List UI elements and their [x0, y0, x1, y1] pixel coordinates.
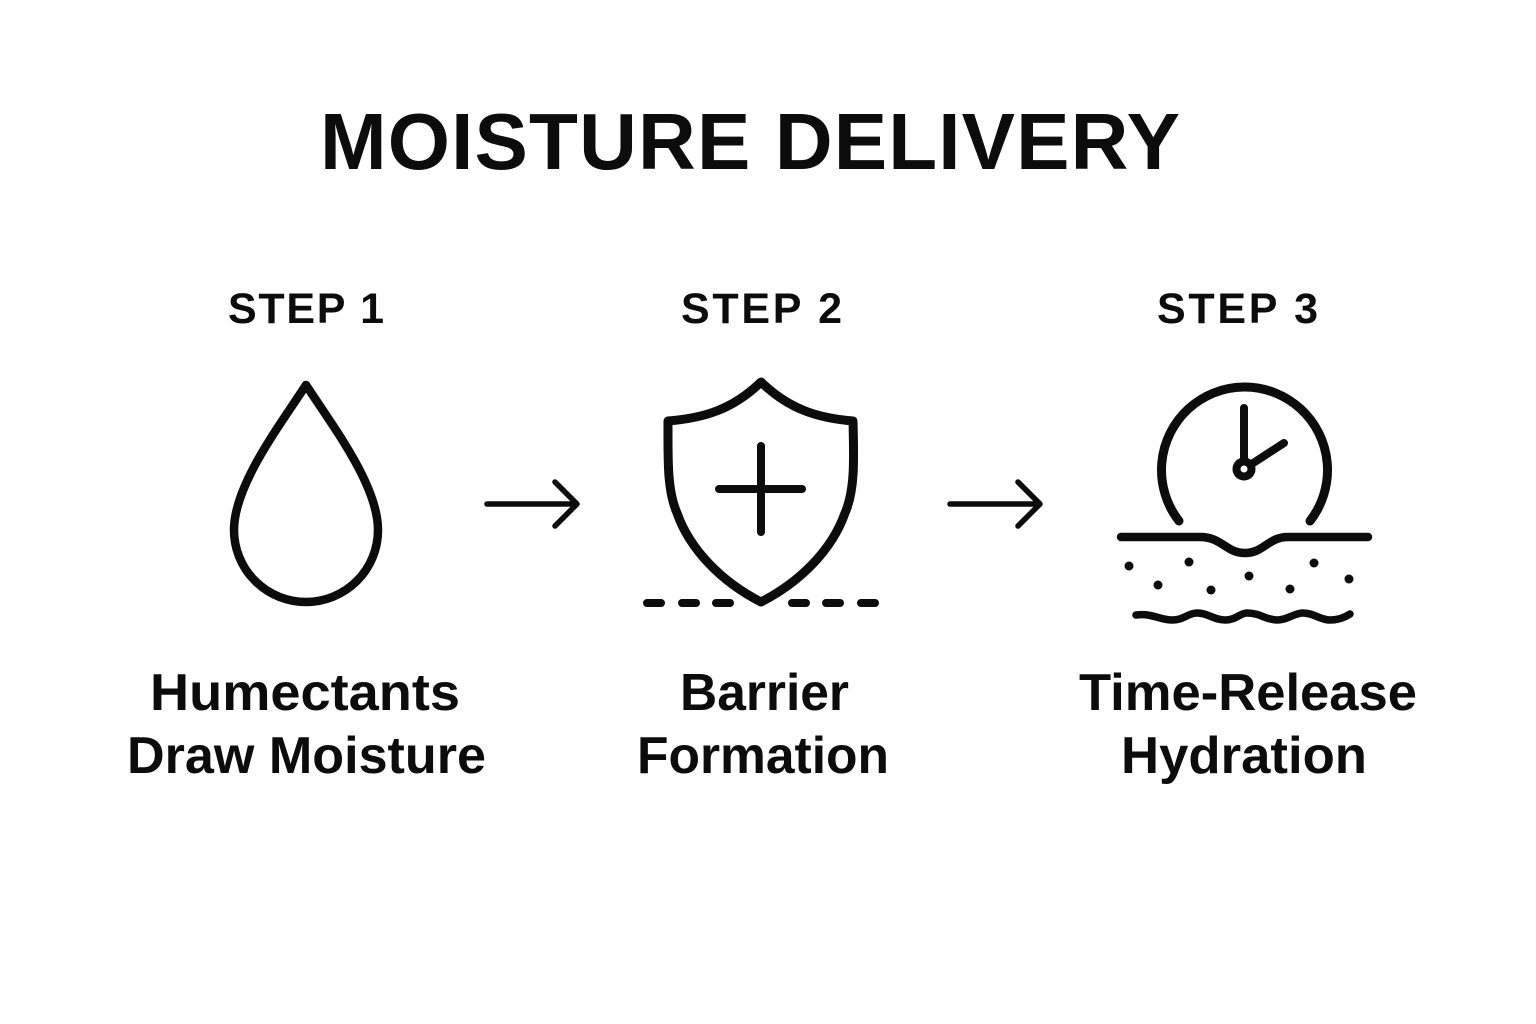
label: time-release hydration: Time-Release: [1079, 664, 1417, 722]
icon: clock over skin layers: [1121, 387, 1368, 620]
label: barrier formation: Formation: [637, 727, 889, 785]
heading: step 2: STEP 2: [681, 285, 842, 333]
heading: step 1: STEP 1: [228, 285, 384, 333]
label: humectants draw moisture: Humectants: [150, 664, 460, 722]
label: humectants draw moisture: [127, 664, 486, 785]
icon: shield with plus over dashed barrier: [647, 382, 875, 603]
arrow: step 1 to step 2: [487, 482, 577, 526]
label: time-release hydration: Hydration: [1121, 727, 1367, 785]
title: MOISTURE DELIVERY: [320, 97, 1180, 186]
label: humectants draw moisture: Draw Moisture: [127, 727, 486, 785]
label: barrier formation: [637, 664, 889, 785]
label: barrier formation: Barrier: [680, 664, 849, 722]
label: time-release hydration: [1079, 664, 1417, 785]
arrow: step 2 to step 3: [950, 482, 1040, 526]
panel: step 2: [637, 285, 889, 785]
panel: step 1: [127, 285, 486, 785]
heading: step 3: STEP 3: [1157, 285, 1318, 333]
icon: water drop: [234, 385, 378, 602]
panel: step 3: [1079, 285, 1417, 785]
